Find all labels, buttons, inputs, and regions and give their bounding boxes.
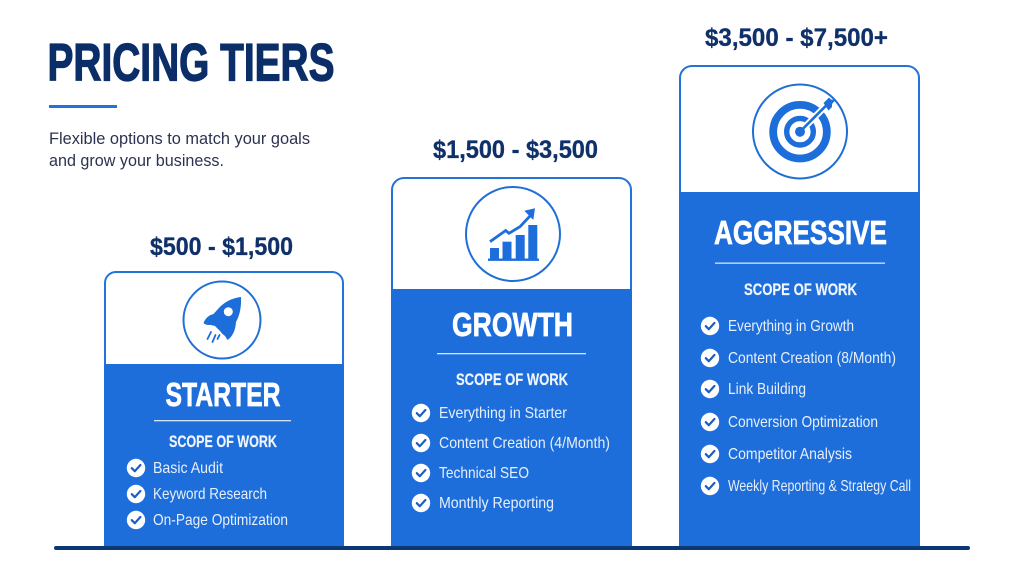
aggressive price: $3,500 - $7,500+ xyxy=(705,24,888,52)
baseline bar xyxy=(54,546,970,550)
growth scope heading: SCOPE OF WORK xyxy=(456,370,569,389)
subtitle: and grow your business. xyxy=(49,152,224,170)
starter checklist xyxy=(127,459,288,529)
starter name: STARTER xyxy=(166,376,281,413)
aggressive checklist: Content Creation (8/Month) xyxy=(728,350,896,367)
starter checklist: Keyword Research xyxy=(153,486,267,503)
aggressive checklist: Everything in Growth xyxy=(728,318,854,335)
subtitle xyxy=(49,130,310,170)
aggressive checklist xyxy=(701,317,911,495)
title: PRICING TIERS xyxy=(48,34,334,92)
growth checklist: Monthly Reporting xyxy=(439,495,554,512)
starter blue body xyxy=(104,364,344,547)
starter scope heading: SCOPE OF WORK xyxy=(169,432,278,451)
aggressive checklist: Competitor Analysis xyxy=(728,446,852,463)
aggressive checklist: Link Building xyxy=(728,381,806,398)
starter card xyxy=(105,272,343,547)
icon: rocket xyxy=(184,282,260,358)
growth checklist: Content Creation (4/Month) xyxy=(439,435,610,452)
growth checklist xyxy=(412,404,610,512)
starter checklist: Basic Audit xyxy=(153,460,223,477)
aggressive checklist: Weekly Reporting & Strategy Call xyxy=(728,478,911,495)
aggressive name: AGGRESSIVE xyxy=(714,214,887,251)
growth price: $1,500 - $3,500 xyxy=(433,136,598,164)
aggressive blue body xyxy=(679,192,920,547)
aggressive checklist: Conversion Optimization xyxy=(728,414,878,431)
aggressive card xyxy=(680,66,919,547)
panel: growth tier xyxy=(391,136,632,547)
starter checklist: On-Page Optimization xyxy=(153,512,288,529)
aggressive scope heading: SCOPE OF WORK xyxy=(744,280,858,299)
icon: target xyxy=(753,84,847,178)
growth blue body xyxy=(391,289,632,547)
growth checklist: Everything in Starter xyxy=(439,405,568,422)
title accent rule xyxy=(49,105,117,108)
panel: aggressive tier xyxy=(679,24,920,547)
panel: starter tier xyxy=(104,233,344,547)
starter price: $500 - $1,500 xyxy=(150,233,293,261)
growth name: GROWTH xyxy=(452,306,573,343)
icon: growth chart xyxy=(466,187,560,281)
subtitle: Flexible options to match your goals xyxy=(49,130,310,148)
growth card xyxy=(392,178,631,547)
growth checklist: Technical SEO xyxy=(439,465,529,482)
